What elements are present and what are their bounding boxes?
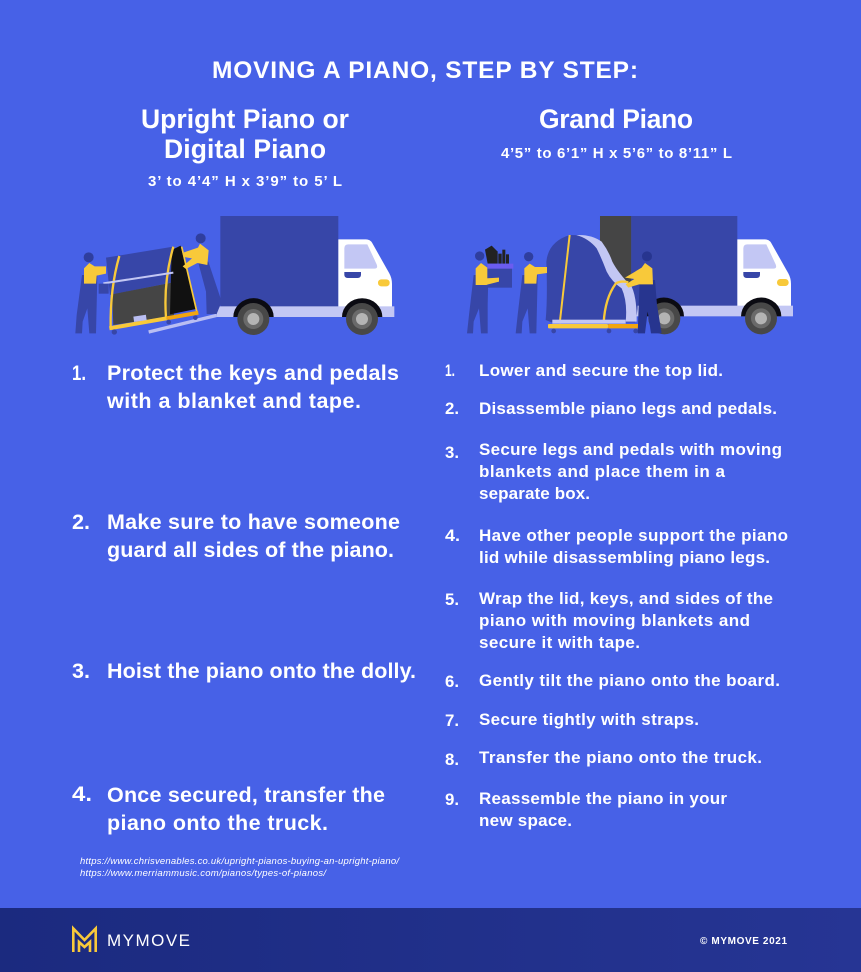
step 8: Transfer the piano onto the truck.	[479, 748, 762, 767]
left mover	[75, 252, 109, 333]
step 3: 3.	[445, 443, 459, 462]
step 2: Disassemble piano legs and pedals.	[479, 399, 777, 418]
panel: upright piano heading	[141, 104, 349, 190]
step 7: 7.	[445, 711, 459, 730]
heading: digital piano: Digital Piano	[164, 134, 326, 164]
step 4: 4.	[72, 782, 92, 806]
step 3: 3.	[72, 659, 90, 683]
step 4: lid while disassembling piano legs.	[479, 548, 770, 567]
logo wordmark: MYMOVE	[107, 931, 190, 950]
step 1	[72, 361, 399, 413]
wrapped grand piano on dolly	[546, 235, 639, 333]
step 5: 5.	[445, 590, 459, 609]
middle mover	[516, 252, 547, 333]
copyright: © MYMOVE 2021	[700, 936, 787, 947]
step 5: secure it with tape.	[479, 633, 640, 652]
step 1: 1.	[445, 361, 455, 380]
truck	[217, 216, 394, 335]
step 2: 2.	[72, 510, 90, 534]
step 3	[445, 440, 782, 503]
source links	[80, 856, 400, 879]
step 1: Protect the keys and pedals	[107, 361, 399, 385]
grand dimensions: 4’5” to 6’1” H x 5’6” to 8’11” L	[501, 145, 732, 162]
step 9: Reassemble the piano in your	[479, 789, 727, 808]
step 4: Have other people support the piano	[479, 526, 788, 545]
source links: https://www.merriammusic.com/pianos/types-of-pianos/	[80, 868, 327, 879]
step 3: Secure legs and pedals with moving	[479, 440, 782, 459]
step 1: with a blanket and tape.	[106, 389, 361, 413]
step 2: 2.	[445, 399, 459, 418]
panel: grand piano heading	[501, 104, 732, 162]
step 5: Wrap the lid, keys, and sides of the	[479, 589, 773, 608]
ramp	[149, 315, 217, 332]
step 1: Lower and secure the top lid.	[479, 361, 723, 380]
right mover	[625, 251, 662, 333]
step 2	[72, 510, 400, 562]
step 2: guard all sides of the piano.	[107, 538, 394, 562]
upright piano on dolly	[103, 246, 198, 335]
list: upright piano steps	[72, 361, 416, 835]
step 1: 1.	[72, 361, 86, 385]
step 3: Hoist the piano onto the dolly.	[107, 659, 416, 683]
right mover	[183, 233, 222, 314]
step 5	[445, 589, 773, 652]
step 4: Once secured, transfer the	[107, 783, 385, 807]
step 4: 4.	[445, 526, 460, 545]
upright dimensions: 3’ to 4’4” H x 3’9” to 5’ L	[148, 173, 342, 190]
step 3: blankets and place them in a	[479, 462, 726, 481]
source links: https://www.chrisvenables.co.uk/upright-pianos-buying-an-upright-piano/	[80, 856, 400, 867]
step 9	[445, 789, 727, 830]
heading: upright piano: Upright Piano or	[141, 104, 349, 134]
mover with box	[467, 246, 513, 333]
step 4: piano onto the truck.	[107, 811, 328, 835]
illustration: grand piano being loaded on truck	[467, 216, 793, 334]
step 4	[72, 782, 385, 835]
list: grand piano steps	[445, 361, 788, 830]
step 8: 8.	[445, 750, 459, 769]
illustration: upright piano being loaded on truck	[75, 216, 394, 335]
truck	[600, 216, 793, 334]
step 5: piano with moving blankets and	[479, 611, 750, 630]
title: MOVING A PIANO, STEP BY STEP:	[212, 57, 638, 84]
step 6: Gently tilt the piano onto the board.	[479, 671, 780, 690]
step 9: new space.	[479, 811, 572, 830]
icon: MyMove logo	[73, 928, 96, 952]
step 6: 6.	[445, 672, 459, 691]
step 9: 9.	[445, 790, 459, 809]
step 2: Make sure to have someone	[107, 510, 400, 534]
step 3: separate box.	[479, 484, 590, 503]
footer bar	[0, 908, 861, 972]
step 7: Secure tightly with straps.	[479, 710, 699, 729]
heading: grand piano: Grand Piano	[539, 104, 693, 134]
step 4	[445, 526, 788, 567]
